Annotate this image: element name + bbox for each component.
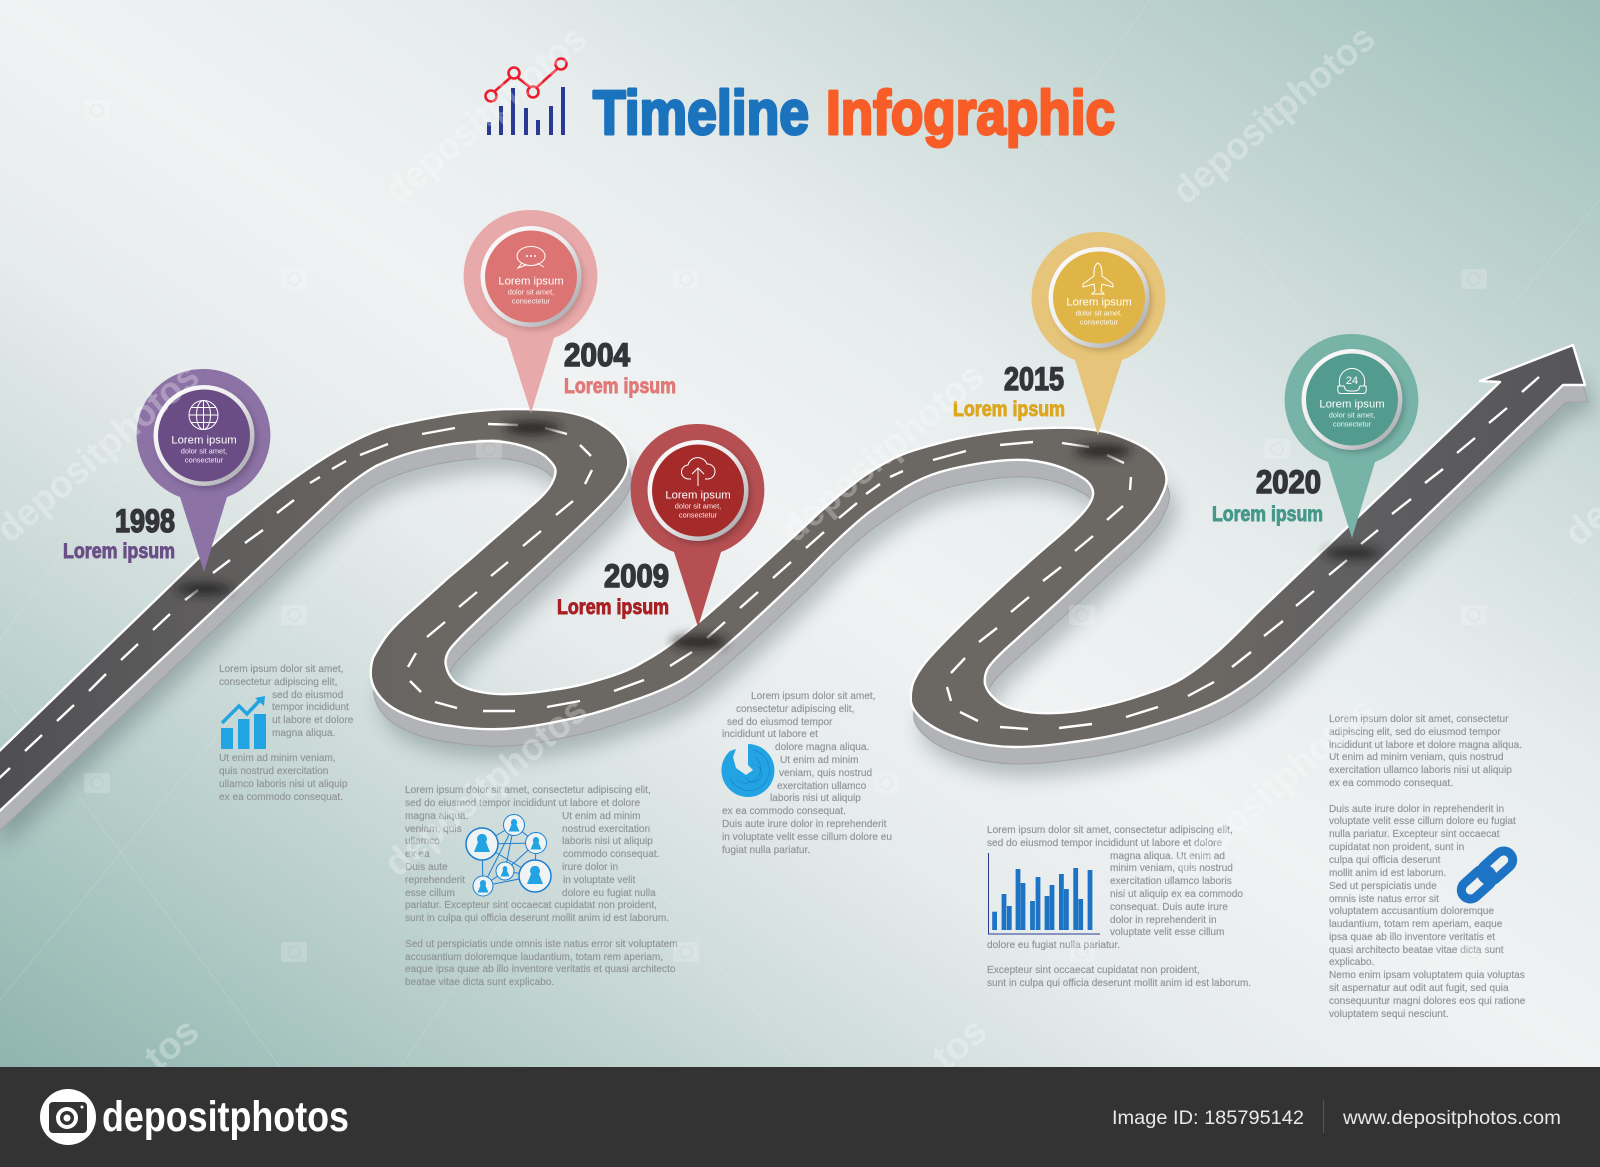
text block 4: exercitation ullamco laboris bbox=[1110, 876, 1232, 887]
title: Infographic bbox=[826, 79, 1115, 148]
text block 4: sed do eiusmod tempor incididunt ut labore et dolore bbox=[987, 838, 1222, 849]
title: Timeline bbox=[593, 79, 809, 148]
year and label: 1998 bbox=[63, 503, 175, 563]
pin: 2015 bbox=[1032, 232, 1165, 435]
text block 2: Duis aute bbox=[405, 862, 448, 873]
pin: 2004 bbox=[464, 210, 597, 413]
year and label: 2015: Lorem ipsum bbox=[953, 398, 1065, 421]
pin: 1998 bbox=[137, 369, 270, 572]
text block 3: in voluptate velit esse cillum dolore eu bbox=[722, 832, 892, 843]
text block 4 bbox=[987, 825, 1251, 989]
pin: 2020: Lorem ipsum bbox=[1319, 398, 1385, 410]
text block 2: ullamco bbox=[405, 836, 440, 847]
title bbox=[593, 79, 1115, 148]
text block 5: voluptate velit esse cillum dolore eu fugiat bbox=[1329, 816, 1516, 827]
text block 5: quasi architecto beatae vitae dicta sunt bbox=[1329, 945, 1504, 956]
text block 2: laboris nisi ut aliquip bbox=[562, 836, 653, 847]
pin: 1998: dolor sit amet, bbox=[181, 446, 227, 456]
pin: 2009 bbox=[631, 424, 764, 627]
text block 3: Lorem ipsum dolor sit amet, bbox=[751, 691, 876, 702]
website url: www.depositphotos.com bbox=[1342, 1107, 1561, 1129]
year and label: 1998: 1998 bbox=[115, 503, 175, 539]
pin: 2009: Lorem ipsum bbox=[665, 490, 731, 502]
text block 5: omnis iste natus error sit bbox=[1329, 894, 1439, 905]
text block 4: dolore eu fugiat nulla pariatur. bbox=[987, 940, 1120, 951]
text block 5: ex ea commodo consequat. bbox=[1329, 778, 1453, 789]
text block 5: Ut enim ad minim veniam, quis nostrud bbox=[1329, 752, 1503, 763]
text block 2: pariatur. Excepteur sint occaecat cupidatat non proident, bbox=[405, 900, 657, 911]
text block 5: voluptatem sequi nesciunt. bbox=[1329, 1009, 1449, 1020]
year and label: 2015 bbox=[953, 361, 1065, 421]
watermarks: depositphotos bbox=[377, 689, 595, 885]
year and label: 2009: Lorem ipsum bbox=[557, 596, 669, 619]
text block 1: ex ea commodo consequat. bbox=[219, 792, 343, 803]
text block 4: dolor in reprehenderit in bbox=[1110, 915, 1217, 926]
icon: globe bbox=[189, 400, 218, 430]
watermarks: tos bbox=[925, 1010, 995, 1079]
text block 2: veniam, quis bbox=[405, 824, 462, 835]
pin base shadows bbox=[176, 421, 1380, 649]
pin: 2020: consectetur bbox=[1333, 420, 1372, 428]
bar chart bbox=[988, 853, 1100, 934]
text block 5: mollit anim id est laborum. bbox=[1329, 868, 1446, 879]
text block 2: sunt in culpa qui officia deserunt mollit anim id est laborum. bbox=[405, 913, 669, 924]
text block 2: eaque ipsa quae ab illo inventore veritatis et quasi architecto bbox=[405, 964, 676, 975]
text block 1: Lorem ipsum dolor sit amet, bbox=[219, 664, 344, 675]
text block 5: sit aspernatur aut odit aut fugit, sed quia bbox=[1329, 983, 1509, 994]
watermarks: depositphotos bbox=[1165, 689, 1383, 885]
text block 5: Lorem ipsum dolor sit amet, consectetur bbox=[1329, 714, 1509, 725]
text block 3 bbox=[722, 691, 892, 856]
year and label: 2020 bbox=[1212, 464, 1323, 526]
text block 4: Lorem ipsum dolor sit amet, consectetur adipiscing elit, bbox=[987, 825, 1233, 836]
year and label: 2004: Lorem ipsum bbox=[564, 375, 676, 398]
year and label: 2009: 2009 bbox=[604, 558, 669, 594]
text block 2: esse cillum bbox=[405, 888, 455, 899]
text block 1: sed do eiusmod bbox=[272, 690, 343, 701]
pin: 2020: dolor sit amet, bbox=[1329, 410, 1375, 420]
text block 2: magna aliqua. bbox=[405, 811, 468, 822]
watermarks: depositphotos bbox=[774, 355, 992, 551]
text block 5: voluptatem accusantium doloremque bbox=[1329, 906, 1494, 917]
pin: 2015: Lorem ipsum bbox=[1066, 296, 1132, 308]
pin: 2020 bbox=[1285, 334, 1418, 538]
icon: concentric ring wedge bbox=[721, 744, 774, 797]
text block 5: ipsa quae ab illo inventore veritatis et bbox=[1329, 932, 1495, 943]
year and label: 2015: 2015 bbox=[1004, 361, 1064, 397]
text block 5: culpa qui officia deserunt bbox=[1329, 855, 1441, 866]
text block 4: voluptate velit esse cillum bbox=[1110, 927, 1224, 938]
text block 1: Ut enim ad minim veniam, bbox=[219, 753, 336, 764]
text block 3: ex ea commodo consequat. bbox=[722, 806, 846, 817]
pin: 2009: dolor sit amet, bbox=[675, 502, 721, 510]
footer banner bbox=[0, 1067, 1600, 1167]
text block 2: irure dolor in bbox=[562, 862, 618, 873]
text block 3: Ut enim ad minim bbox=[780, 755, 859, 766]
text block 2: ex ea bbox=[405, 849, 430, 860]
text block 2: Lorem ipsum dolor sit amet, consectetur adipiscing elit, bbox=[405, 785, 651, 796]
text block 4: consequat. Duis aute irure bbox=[1110, 902, 1228, 913]
icon: camera logo bbox=[40, 1089, 96, 1145]
pin: 1998: consectetur bbox=[185, 456, 224, 464]
text block 5: cupidatat non proident, sunt in bbox=[1329, 842, 1464, 853]
text block 4: minim veniam, quis nostrud bbox=[1110, 863, 1233, 874]
text block 3: laboris nisi ut aliquip bbox=[770, 793, 861, 804]
text block 5: explicabo. bbox=[1329, 957, 1374, 968]
watermarks: depositphotos bbox=[377, 17, 595, 213]
text block 3: incididunt ut labore et bbox=[722, 729, 818, 740]
text block 4: Excepteur sint occaecat cupidatat non proident, bbox=[987, 965, 1200, 976]
text block 3: veniam, quis nostrud bbox=[779, 768, 872, 779]
year and label: 2004 bbox=[564, 337, 676, 398]
icon: speech bubbles bbox=[517, 246, 545, 268]
text block 5: Duis aute irure dolor in reprehenderit in bbox=[1329, 804, 1504, 815]
text block 5: consequuntur magni dolores eos qui ratione bbox=[1329, 996, 1526, 1007]
watermarks: tos bbox=[137, 1010, 207, 1079]
image id: Image ID: 185795142 bbox=[1112, 1107, 1304, 1129]
text block 4: nisi ut aliquip ex ea commodo bbox=[1110, 889, 1243, 900]
text block 4: sunt in culpa qui officia deserunt mollit anim id est laborum. bbox=[987, 978, 1251, 989]
text block 2: nostrud exercitation bbox=[562, 824, 650, 835]
logo wordmark: depositphotos bbox=[102, 1093, 349, 1141]
text block 5: adipiscing elit, sed do eiusmod tempor bbox=[1329, 727, 1501, 738]
text block 3: sed do eiusmod tempor bbox=[727, 717, 833, 728]
pin: 2004: consectetur bbox=[512, 296, 551, 306]
title icon: bar chart with trend line bbox=[486, 58, 566, 135]
icon: airplane bbox=[1083, 263, 1113, 294]
icon: people network bbox=[466, 814, 551, 896]
year and label: 2020: Lorem ipsum bbox=[1212, 503, 1323, 526]
icon: chain link bbox=[1458, 847, 1516, 903]
year and label: 1998: Lorem ipsum bbox=[63, 540, 175, 563]
pin: 2015: consectetur bbox=[1080, 318, 1119, 326]
text block 2: in voluptate velit bbox=[563, 875, 636, 886]
pin: 2015: dolor sit amet, bbox=[1076, 308, 1122, 318]
text block 2 bbox=[405, 785, 678, 988]
text block 3: exercitation ullamco bbox=[777, 781, 867, 792]
text block 3: consectetur adipiscing elit, bbox=[736, 704, 854, 715]
text block 1: consectetur adipiscing elit, bbox=[219, 677, 337, 688]
text block 1: quis nostrud exercitation bbox=[219, 766, 328, 777]
text block 1 bbox=[219, 664, 354, 803]
text block 3: Duis aute irure dolor in reprehenderit bbox=[722, 819, 887, 830]
text block 1: magna aliqua. bbox=[272, 728, 335, 739]
text block 5: Nemo enim ipsam voluptatem quia voluptas bbox=[1329, 970, 1525, 981]
text block 1: ullamco laboris nisi ut aliquip bbox=[219, 779, 348, 790]
year and label: 2009 bbox=[557, 558, 669, 619]
pin: 2004: Lorem ipsum bbox=[498, 276, 564, 288]
year and label: 2020: 2020 bbox=[1256, 464, 1321, 500]
text block 5: incididunt ut labore et dolore magna aliqua. bbox=[1329, 740, 1522, 751]
text block 2: Ut enim ad minim bbox=[562, 811, 641, 822]
icon: 24 hour phone: 24 bbox=[1346, 375, 1358, 387]
icon: rising bar chart bbox=[221, 696, 266, 749]
text block 2: sed do eiusmod tempor incididunt ut labore et dolore bbox=[405, 798, 640, 809]
text block 2: accusantium doloremque laudantium, totam rem aperiam, bbox=[405, 952, 663, 963]
text block 1: ut labore et dolore bbox=[272, 715, 354, 726]
pin: 1998: Lorem ipsum bbox=[171, 434, 237, 446]
winding road with arrow bbox=[0, 345, 1595, 850]
icon: 24 hour phone bbox=[1338, 368, 1366, 394]
text block 3: fugiat nulla pariatur. bbox=[722, 845, 810, 856]
text block 1: tempor incididunt bbox=[272, 702, 349, 713]
watermarks: depositphotos bbox=[1165, 17, 1383, 213]
text block 2: reprehenderit bbox=[405, 875, 465, 886]
text block 2: Sed ut perspiciatis unde omnis iste natus error sit voluptatem bbox=[405, 939, 678, 950]
year and label: 2004: 2004 bbox=[564, 337, 630, 373]
text block 5: exercitation ullamco laboris nisi ut aliquip bbox=[1329, 765, 1512, 776]
text block 5: laudantium, totam rem aperiam, eaque bbox=[1329, 919, 1503, 930]
text block 5: nulla pariatur. Excepteur sint occaecat bbox=[1329, 829, 1500, 840]
text block 2: dolore eu fugiat nulla bbox=[562, 888, 656, 899]
text block 2: beatae vitae dicta sunt explicabo. bbox=[405, 977, 554, 988]
road centre dashes bbox=[0, 377, 1539, 782]
pin: 2009: consectetur bbox=[679, 510, 718, 520]
text block 5 bbox=[1329, 714, 1526, 1020]
text block 4: magna aliqua. Ut enim ad bbox=[1110, 851, 1225, 862]
pin: 2004: dolor sit amet, bbox=[508, 288, 554, 296]
text block 2: commodo consequat. bbox=[563, 849, 660, 860]
icon: cloud upload bbox=[681, 458, 715, 486]
text block 5: Sed ut perspiciatis unde bbox=[1329, 881, 1437, 892]
text block 3: dolore magna aliqua. bbox=[775, 742, 869, 753]
